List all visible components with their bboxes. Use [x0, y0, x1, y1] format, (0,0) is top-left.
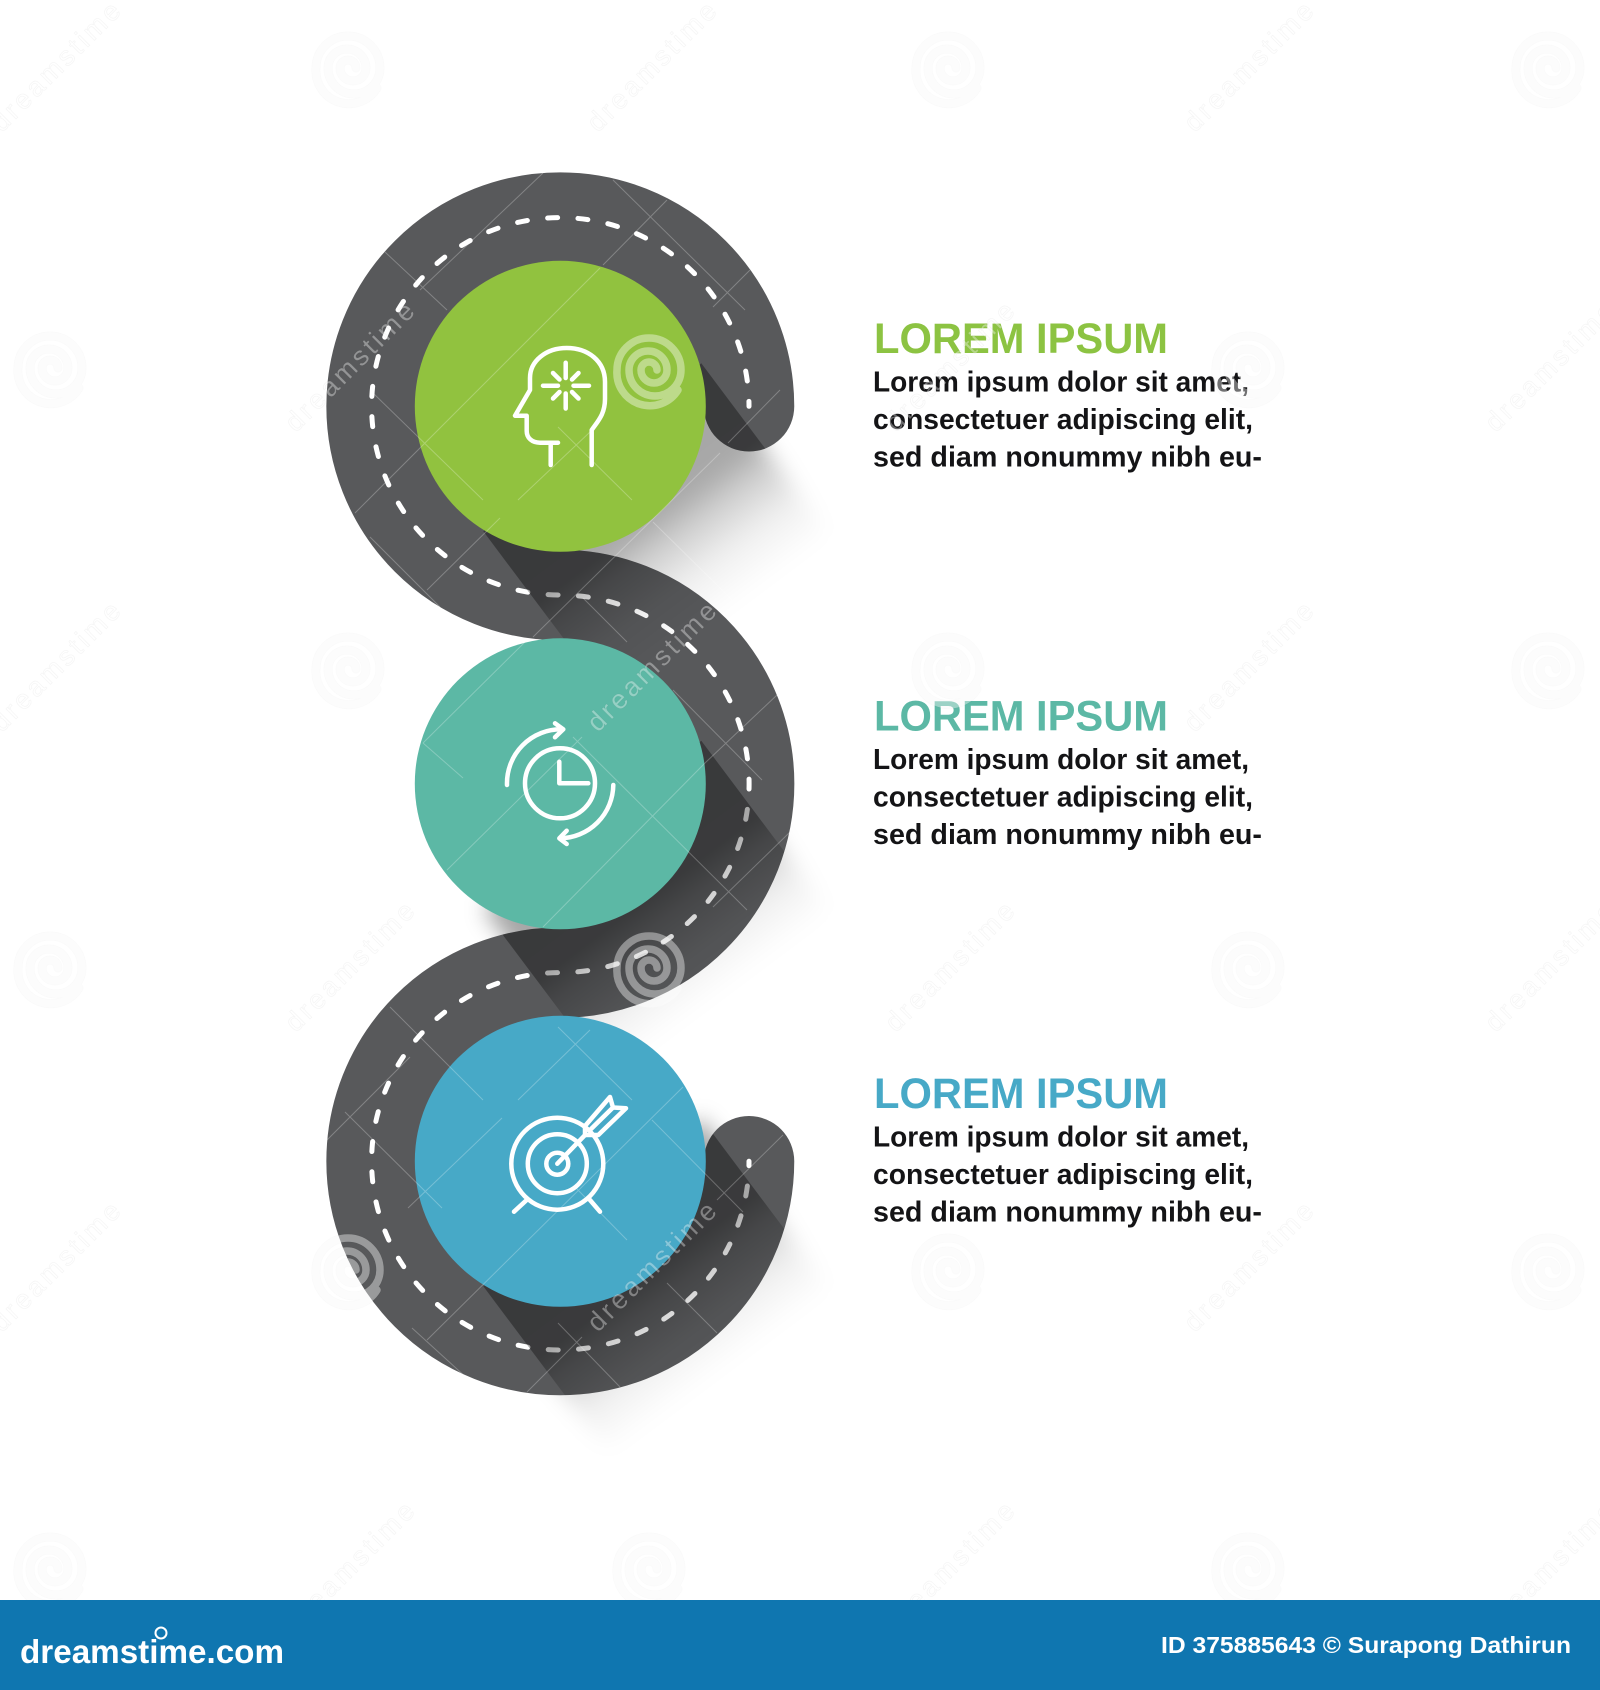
icon: clock with cycle arrows	[507, 723, 613, 844]
icon: head with spark	[515, 348, 605, 465]
step 3 blue circle	[415, 1016, 706, 1307]
heading 1: LOREM IPSUM	[874, 315, 1168, 363]
footer logo: dreamstime.com	[20, 1633, 284, 1670]
icon: target with arrow	[511, 1097, 626, 1212]
body 3: sed diam nonummy nibh eu-	[873, 1197, 1262, 1229]
text block 3	[873, 1070, 1262, 1229]
watermark diagonal text: dreamstime	[879, 1496, 1020, 1637]
body 2: Lorem ipsum dolor sit amet,	[873, 744, 1249, 776]
text block 1	[873, 315, 1262, 474]
watermark diagonal text: dreamstime	[1178, 1196, 1319, 1337]
heading 2: LOREM IPSUM	[874, 692, 1168, 740]
watermark diagonal text: dreamstime	[279, 296, 420, 437]
step 1 green circle	[415, 261, 706, 552]
watermark diagonal text: dreamstime	[581, 1196, 722, 1337]
footer bar	[0, 1600, 1600, 1690]
heading 3: LOREM IPSUM	[874, 1070, 1168, 1118]
body 2: consectetuer adipiscing elit,	[873, 782, 1253, 814]
watermark diagonal text: dreamstime	[1178, 596, 1319, 737]
body 1: consectetuer adipiscing elit,	[873, 404, 1253, 436]
road surface	[372, 218, 749, 1350]
watermark diagonal text: dreamstime	[279, 1496, 420, 1637]
road centre dashes	[372, 218, 749, 1350]
body 1: Lorem ipsum dolor sit amet,	[873, 366, 1249, 398]
footer credit: ID 375885643 © Surapong Dathirun	[1161, 1632, 1571, 1658]
watermark diagonal text: dreamstime	[1178, 0, 1319, 137]
watermark grid lines	[327, 173, 790, 1392]
winding road	[372, 218, 749, 1350]
body 3: consectetuer adipiscing elit,	[873, 1159, 1253, 1191]
long shadows falling across the road	[484, 363, 784, 1395]
step 2 teal circle	[415, 638, 706, 929]
body 3: Lorem ipsum dolor sit amet,	[873, 1122, 1249, 1154]
watermark diagonal text: dreamstime	[879, 296, 1020, 437]
body 2	[873, 744, 1262, 851]
watermark diagonal text: dreamstime	[581, 0, 722, 137]
watermark diagonal text: dreamstime	[581, 596, 722, 737]
body 3	[873, 1122, 1262, 1229]
footer logo spiral	[156, 1628, 166, 1638]
body 2: sed diam nonummy nibh eu-	[873, 819, 1262, 851]
text block 2	[873, 692, 1262, 851]
body 1: sed diam nonummy nibh eu-	[873, 442, 1262, 474]
watermark diagonal text: dreamstime	[279, 896, 420, 1037]
soft long shadows on the white page	[483, 363, 899, 1550]
watermark diagonal text: dreamstime	[879, 896, 1020, 1037]
body 1	[873, 366, 1262, 474]
